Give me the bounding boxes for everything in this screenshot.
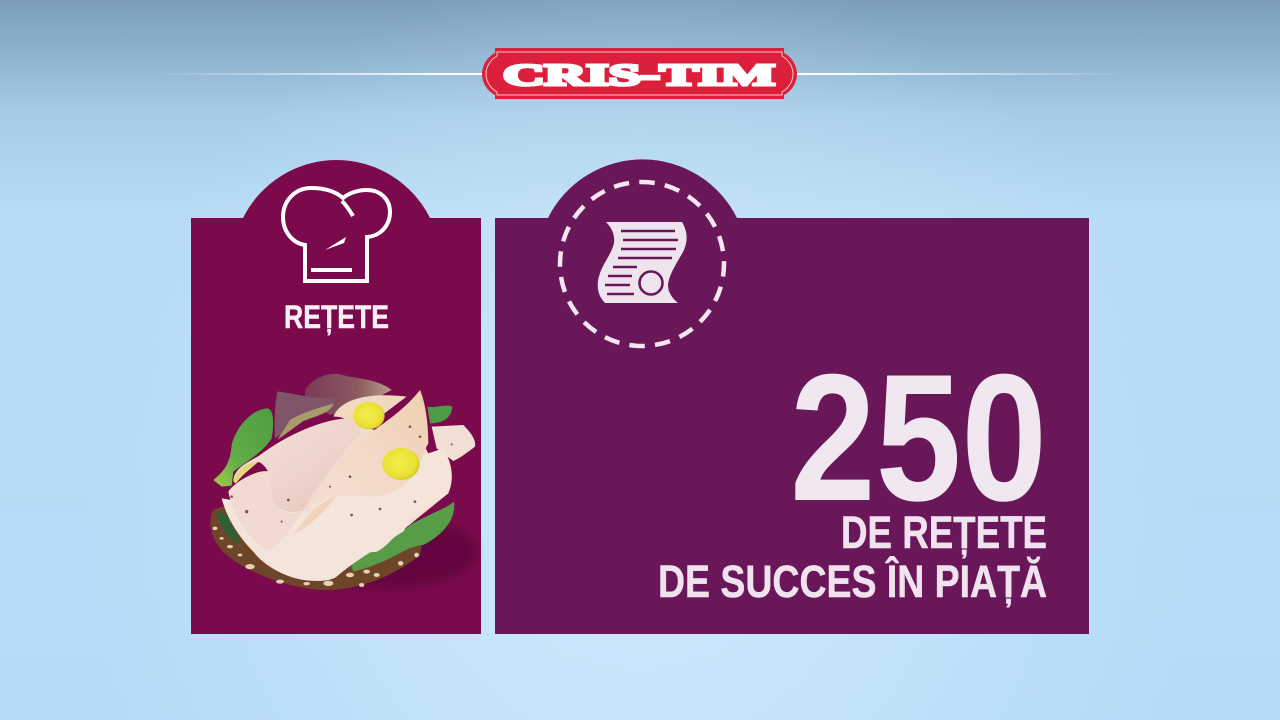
lettuce xyxy=(305,374,392,415)
bread xyxy=(210,505,422,590)
panel: statistic xyxy=(495,159,1089,634)
heading: recipes: REȚETE xyxy=(284,299,389,335)
caption: DE SUCCES ÎN PIAȚĂ xyxy=(658,556,1047,607)
green leaves xyxy=(213,408,273,487)
icon: chef hat xyxy=(283,188,390,281)
panel: recipes xyxy=(191,160,481,634)
header rule xyxy=(150,73,1130,75)
icon: recipe scroll xyxy=(598,222,687,303)
caption xyxy=(658,507,1047,607)
herb specks xyxy=(230,425,453,523)
logo: Cris-Tim xyxy=(482,48,797,99)
caption: DE REȚETE xyxy=(841,507,1047,558)
big number: 250 xyxy=(790,337,1047,539)
yellow pickles xyxy=(353,402,385,429)
icon: dashed circle xyxy=(557,179,727,349)
ham slices xyxy=(222,390,475,581)
illustration: ham sandwich xyxy=(210,374,477,590)
logo: Cris-Tim: CRIS-TIM xyxy=(503,57,775,92)
